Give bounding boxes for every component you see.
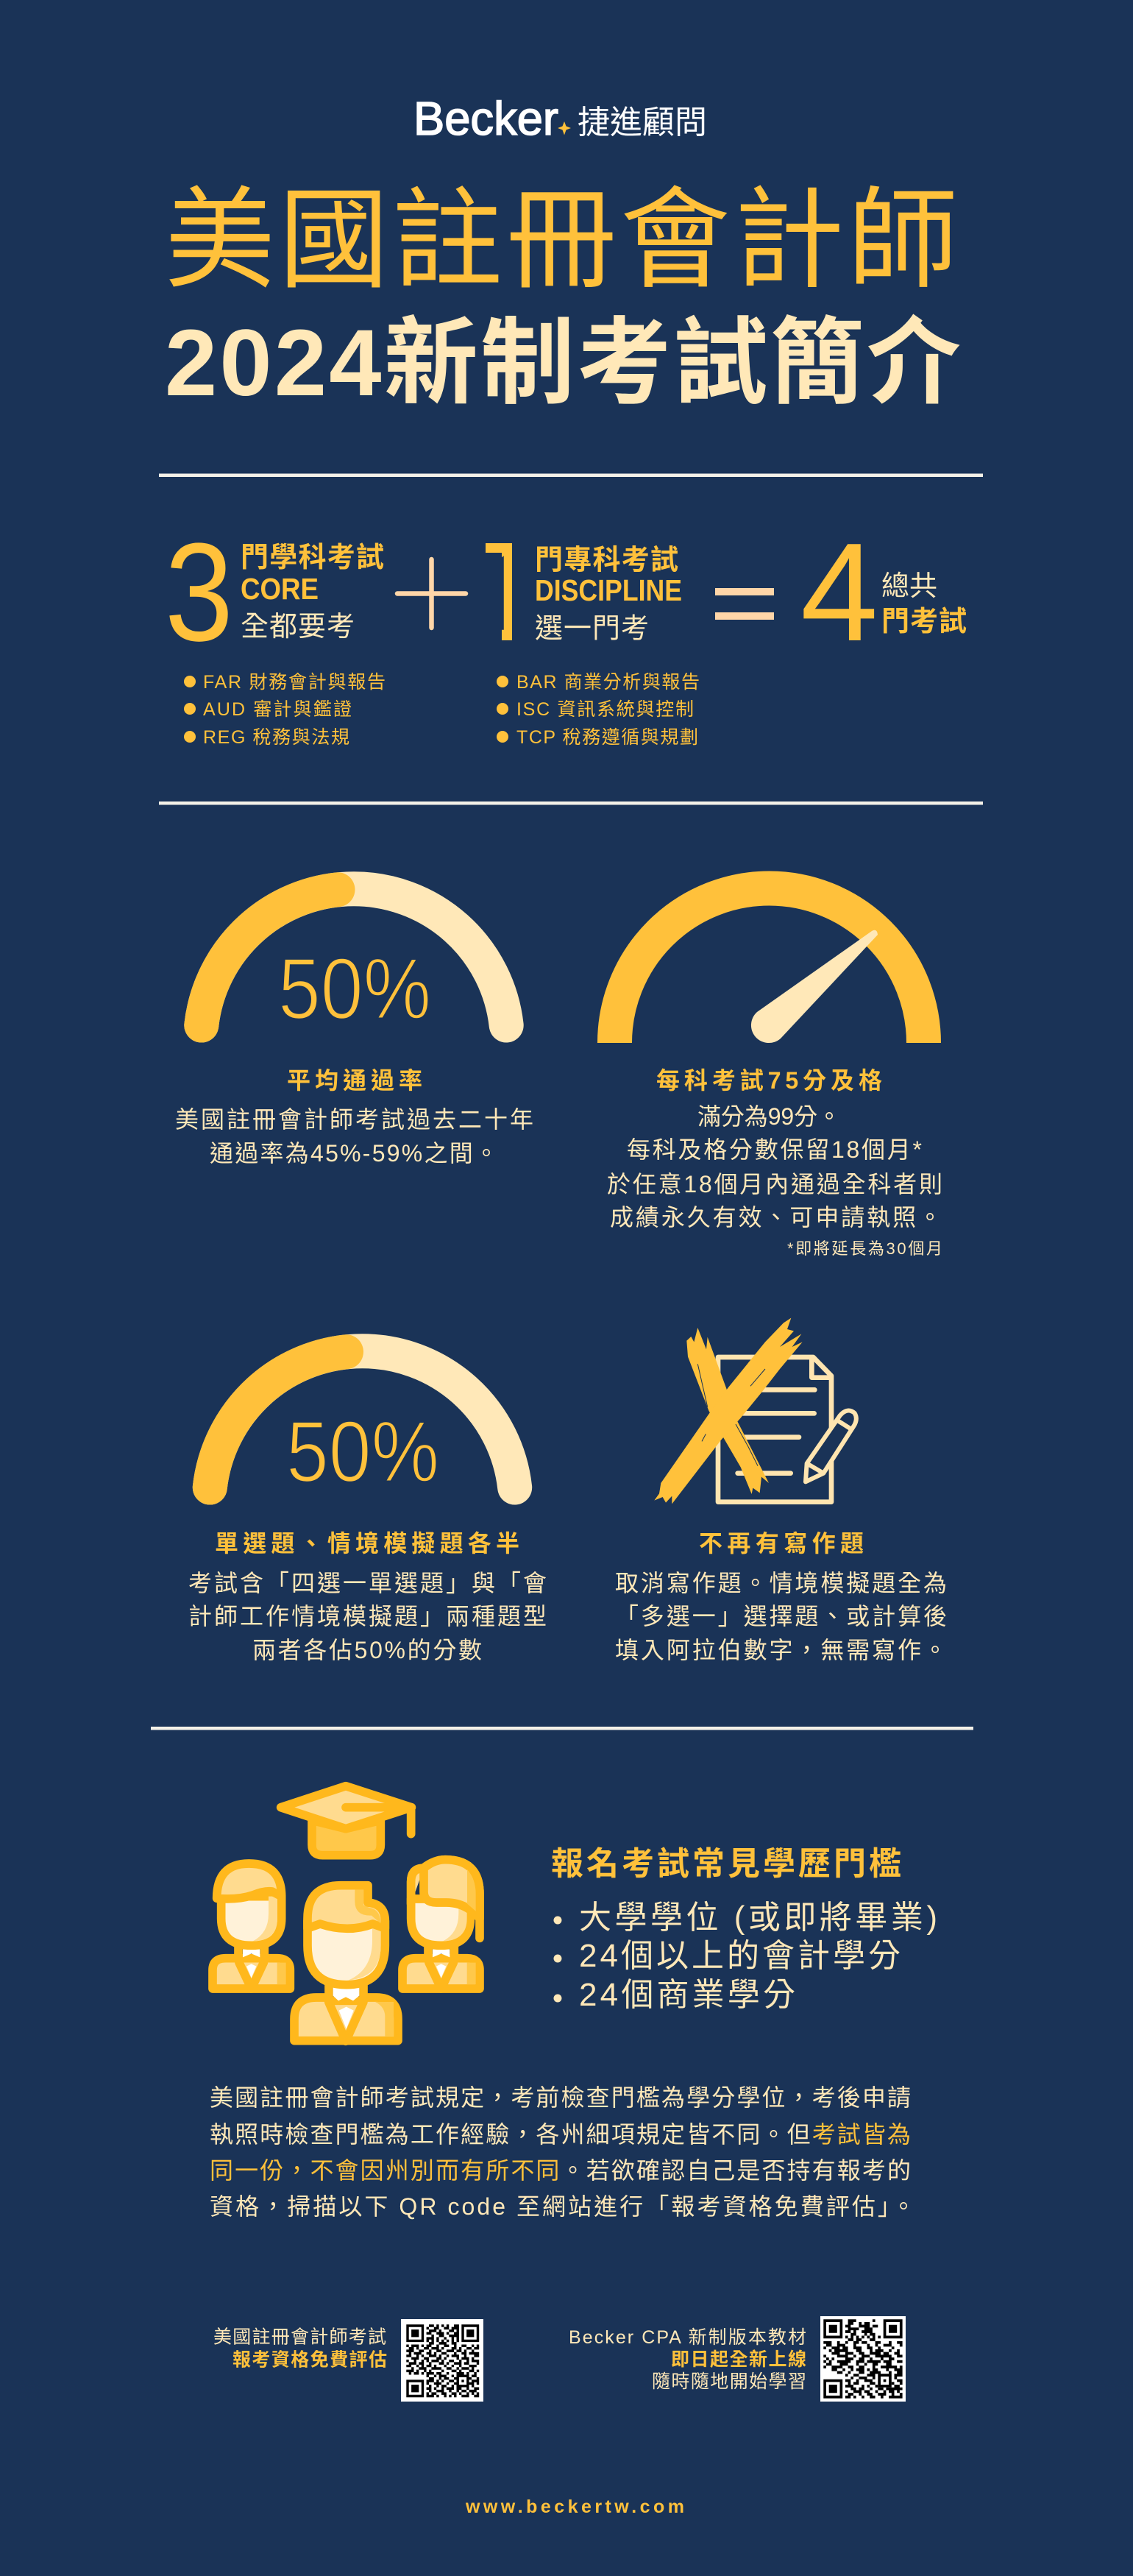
core exam list: AUD 審計與鑑證 <box>203 699 352 720</box>
website url: www.beckertw.com <box>465 2497 684 2517</box>
QR code <box>401 2319 483 2402</box>
requirement list: 24個以上的會計學分 <box>579 1938 901 1974</box>
graduation cap <box>281 1786 411 1855</box>
heading: 平均通過率 <box>287 1067 422 1094</box>
title: 2024新制考試簡介 <box>165 311 961 416</box>
requirement list: 24個商業學分 <box>579 1977 795 2013</box>
paragraph: exam rules <box>210 2084 915 2220</box>
icon: plus sign <box>397 559 466 628</box>
core exams: 門學科考試 <box>241 542 384 573</box>
paragraph: exam rules: 執照時檢查門檻為工作經驗，各州細項規定皆不同。但考試皆為 <box>210 2121 911 2148</box>
heading: 不再有寫作題 <box>699 1530 864 1557</box>
total four exams: 門考試 <box>881 606 967 637</box>
icon: equals sign <box>715 588 774 620</box>
discipline exam list: ISC 資訊系統與控制 <box>516 699 694 720</box>
total four exams <box>800 514 967 670</box>
description: 成績永久有效、可申請執照。 <box>610 1204 942 1231</box>
gauge: 50% pass rate <box>202 889 506 1038</box>
description <box>615 1570 947 1663</box>
description: 通過率為45%-59%之間。 <box>210 1140 498 1167</box>
description <box>607 1103 942 1258</box>
core exams: 全都要考 <box>241 612 355 643</box>
discipline exam list: BAR 商業分析與報告 <box>516 672 700 693</box>
center graduate <box>294 1886 398 2041</box>
discipline exams: 選一門考 <box>535 614 649 645</box>
description: 考試含「四選一單選題」與「會 <box>188 1570 547 1596</box>
description: 填入阿拉伯數字，無需寫作。 <box>615 1637 947 1663</box>
QR caption: 即日起全新上線 <box>671 2349 806 2370</box>
gauge: 50% split <box>210 1351 515 1501</box>
discipline exams: 1 <box>469 514 547 670</box>
gauge: speedometer needle <box>615 888 924 1043</box>
description: 美國註冊會計師考試過去二十年 <box>175 1106 533 1133</box>
description: *即將延長為30個月 <box>787 1239 942 1258</box>
logo: Becker 捷進顧問: Becker <box>413 92 558 145</box>
panel: eligibility QR <box>213 2319 483 2402</box>
description <box>188 1570 547 1663</box>
requirement list: 大學學位 (或即將畢業) <box>579 1900 937 1936</box>
paragraph: exam rules: 同一份，不會因州別而有所不同。若欲確認自己是否持有報考的 <box>210 2157 911 2184</box>
left graduate <box>213 1864 290 1989</box>
heading: 報名考試常見學歷門檻 <box>551 1846 901 1882</box>
description: 於任意18個月內通過全科者則 <box>607 1171 942 1197</box>
icon: graduates with cap <box>213 1786 480 2041</box>
total four exams: 總共 <box>881 571 937 602</box>
discipline exams: DISCIPLINE <box>535 573 682 607</box>
panel: exam structure 3+1=4 <box>169 542 967 745</box>
description: 取消寫作題。情境模擬題全為 <box>615 1570 947 1596</box>
title <box>165 178 961 416</box>
requirement list <box>553 1900 937 2013</box>
panel: passing score <box>607 888 942 1258</box>
description: 計師工作情境模擬題」兩種題型 <box>188 1603 547 1630</box>
discipline exams: 門專科考試 <box>535 545 678 576</box>
QR caption: 隨時隨地開始學習 <box>652 2371 806 2392</box>
core exam list: FAR 財務會計與報告 <box>203 672 386 693</box>
core exams: CORE <box>241 572 319 606</box>
QR caption <box>569 2327 806 2392</box>
description: 滿分為99分。 <box>697 1103 841 1130</box>
right graduate <box>402 1860 480 1989</box>
core exam list <box>184 672 386 748</box>
logo: Becker 捷進顧問: 捷進顧問 <box>578 105 707 141</box>
panel: eligibility requirements <box>551 1846 937 2013</box>
paragraph: exam rules: 美國註冊會計師考試規定，考前檢查門檻為學分學位，考後申請 <box>210 2084 911 2111</box>
discipline exams <box>486 543 681 640</box>
logo: Becker 捷進顧問 <box>413 92 707 145</box>
gauge: 50% split: 50% <box>286 1404 439 1501</box>
discipline exam list: TCP 稅務遵循與規劃 <box>516 727 698 748</box>
heading: 單選題、情境模擬題各半 <box>215 1530 519 1557</box>
QR caption: Becker CPA 新制版本教材 <box>569 2327 806 2348</box>
description: 每科及格分數保留18個月* <box>627 1136 922 1163</box>
discipline exam list <box>497 672 700 748</box>
description: 兩者各佔50%的分數 <box>252 1637 482 1663</box>
paragraph: exam rules: 資格，掃描以下 QR code 至網站進行「報考資格免費評估」。 <box>210 2193 915 2220</box>
gauge: 50% pass rate: 50% <box>278 941 431 1038</box>
QR code <box>820 2316 906 2402</box>
title: 美國註冊會計師 <box>165 178 958 302</box>
core exams <box>165 514 384 670</box>
description: 「多選一」選擇題、或計算後 <box>615 1603 947 1630</box>
QR caption: 美國註冊會計師考試 <box>213 2327 386 2348</box>
panel: question types <box>188 1351 547 1663</box>
panel: no essay questions <box>615 1318 947 1663</box>
core exams: 3 <box>165 514 233 670</box>
panel: pass rate <box>175 889 533 1167</box>
QR caption: 報考資格免費評估 <box>232 2349 387 2370</box>
panel: study materials QR <box>569 2316 906 2402</box>
QR caption <box>213 2327 387 2370</box>
icon: crossed-out document with pencil <box>654 1318 856 1504</box>
description <box>175 1106 533 1167</box>
total four exams: 4 <box>800 514 878 670</box>
core exam list: REG 稅務與法規 <box>203 727 349 748</box>
heading: 每科考試75分及格 <box>656 1067 882 1094</box>
